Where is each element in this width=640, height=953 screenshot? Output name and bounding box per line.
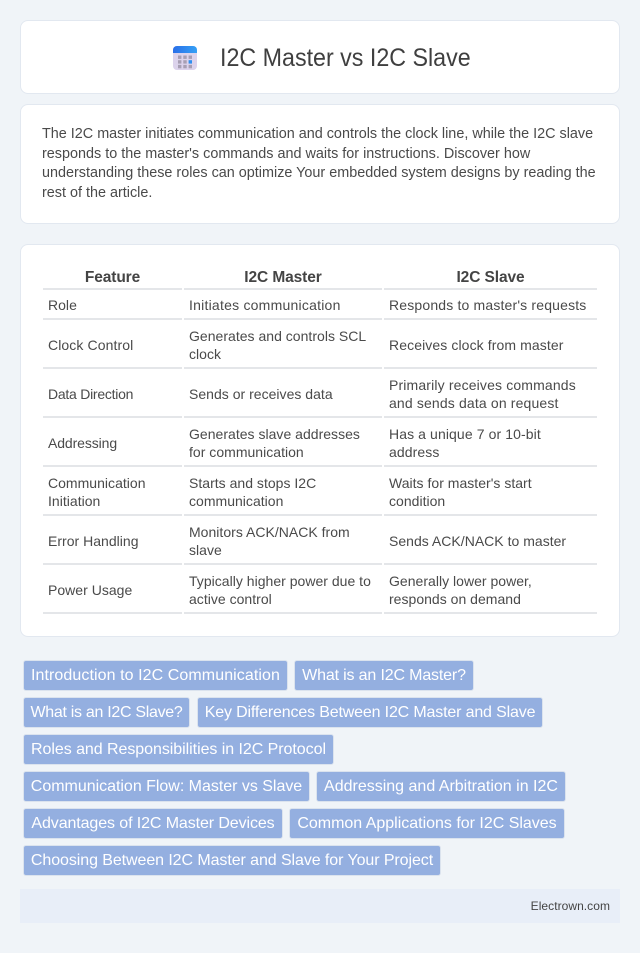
tag [23, 845, 441, 876]
intro paragraph: The I2C master initiates communication and controls the clock line, while the I2C slave [42, 126, 593, 142]
intro paragraph: understanding these roles can optimize Your embedded system designs by reading the [42, 165, 596, 181]
footer source label: Electrown.com [531, 899, 610, 913]
tag [23, 660, 288, 690]
row: Error Handling: slave [189, 542, 222, 558]
row: Data Direction [43, 377, 597, 418]
title: I2C Master vs I2C Slave [220, 44, 471, 72]
row: Communication Initiation: condition [389, 493, 445, 509]
table header row [43, 269, 597, 290]
row: Error Handling [43, 524, 597, 565]
tag [23, 697, 190, 728]
row: Communication Initiation: Waits for master's start [389, 475, 532, 491]
row: Addressing: Addressing [48, 435, 117, 451]
row: Role: Role [48, 297, 77, 313]
row: Clock Control: Clock Control [48, 337, 133, 353]
tag [294, 660, 474, 690]
tag [23, 771, 310, 802]
row: Power Usage [43, 573, 597, 614]
row: Power Usage: Typically higher power due to [189, 573, 371, 589]
row: Power Usage: active control [189, 591, 272, 607]
tag: Roles and Responsibilities in I2C Protocol [31, 741, 326, 758]
tag [23, 808, 283, 838]
row: Clock Control: Generates and controls SCL [189, 328, 366, 344]
row: Clock Control [43, 328, 597, 369]
tag: What is an I2C Slave? [30, 704, 182, 721]
row: Role [43, 297, 597, 320]
row: Role: Initiates communication [189, 297, 341, 313]
row: Addressing: address [389, 444, 440, 460]
tag [289, 808, 565, 838]
row: Communication Initiation: Starts and stops I2C [189, 475, 316, 491]
row: Addressing: Generates slave addresses [189, 426, 360, 442]
tag: Addressing and Arbitration in I2C [324, 778, 558, 795]
row: Clock Control: Receives clock from master [389, 337, 564, 353]
row: Communication Initiation: Initiation [48, 493, 100, 509]
table header row: Feature [85, 269, 140, 286]
row: Error Handling: Error Handling [48, 533, 139, 549]
row: Data Direction: Data Direction [48, 386, 133, 402]
tag [23, 734, 334, 764]
panel: comparison table [20, 244, 620, 637]
row: Addressing [43, 426, 597, 467]
tag: Key Differences Between I2C Master and Slave [205, 704, 535, 721]
tag: Introduction to I2C Communication [31, 667, 280, 684]
row: Data Direction: and sends data on request [389, 395, 559, 411]
row: Role: Responds to master's requests [389, 297, 586, 313]
row: Power Usage: responds on demand [389, 591, 521, 607]
row: Clock Control: clock [189, 346, 221, 362]
footer bar [20, 889, 620, 923]
intro paragraph: responds to the master's commands and waits for instructions. Discover how [42, 146, 530, 162]
row: Communication Initiation [43, 475, 597, 516]
tag [316, 771, 566, 802]
row: Communication Initiation: communication [189, 493, 283, 509]
intro paragraph: rest of the article. [42, 184, 152, 200]
tag: What is an I2C Master? [302, 667, 466, 684]
table header row: I2C Slave [456, 269, 525, 286]
tag list: article topics [23, 660, 566, 876]
row: Power Usage: Power Usage [48, 582, 132, 598]
row: Addressing: Has a unique 7 or 10-bit [389, 426, 541, 442]
icon: calendar [173, 46, 197, 70]
row: Error Handling: Sends ACK/NACK to master [389, 533, 566, 549]
panel: introduction text [20, 104, 620, 224]
row: Communication Initiation: Communication [48, 475, 146, 491]
row: Error Handling: Monitors ACK/NACK from [189, 524, 350, 540]
row: Addressing: for communication [189, 444, 304, 460]
tag: Advantages of I2C Master Devices [31, 815, 275, 832]
row: Power Usage: Generally lower power, [389, 573, 532, 589]
panel: title header [20, 20, 620, 94]
table header row: I2C Master [244, 269, 322, 286]
tag: Common Applications for I2C Slaves [297, 815, 557, 832]
tag: Choosing Between I2C Master and Slave for Your Project [31, 852, 433, 869]
row: Data Direction: Primarily receives commands [389, 377, 576, 393]
intro paragraph [42, 126, 596, 200]
tag [197, 697, 543, 728]
tag: Communication Flow: Master vs Slave [31, 778, 302, 795]
row: Data Direction: Sends or receives data [189, 386, 333, 402]
